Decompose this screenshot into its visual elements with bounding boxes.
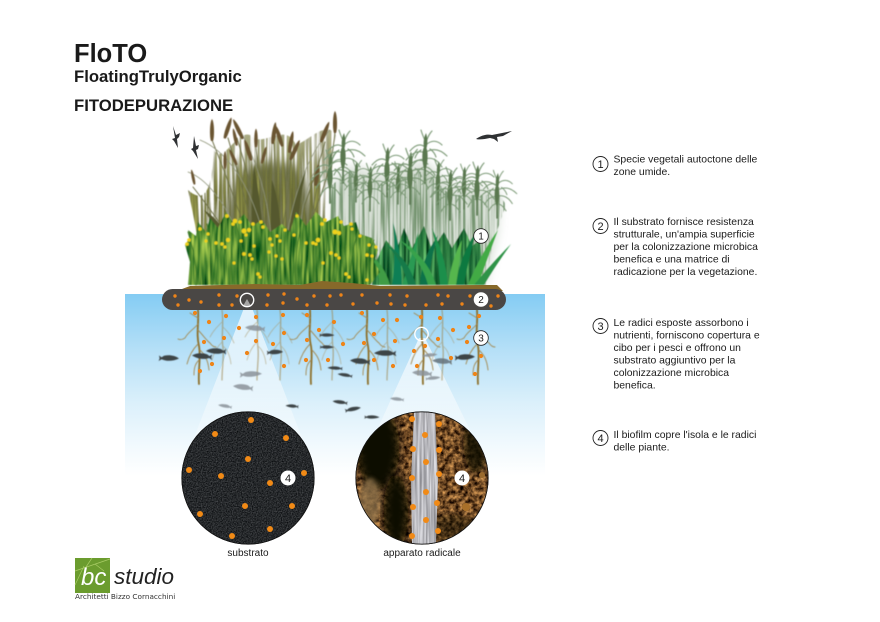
legend item 3: 3 xyxy=(597,321,604,333)
roots xyxy=(178,310,495,384)
legend item 3: nutrienti, forniscono copertura e xyxy=(614,330,760,342)
legend item 3: benefica. xyxy=(614,380,656,392)
icon: bird middle xyxy=(191,136,199,159)
soil layer xyxy=(182,281,503,291)
legend item 3 xyxy=(593,318,760,392)
magnifier ring: substrate xyxy=(240,293,254,307)
caption: apparato radicale: apparato radicale xyxy=(383,548,461,559)
subtitle: FloatingTrulyOrganic xyxy=(74,67,242,86)
yellow iris clump xyxy=(185,212,380,285)
legend item 4: Il biofilm copre l'isola e le radici xyxy=(614,430,756,441)
magnified circle: apparato radicale: 4 xyxy=(459,473,465,485)
legend item 4 xyxy=(593,430,756,454)
legend item 2 xyxy=(593,217,758,278)
green sedge clump xyxy=(362,222,511,285)
legend item 3: Le radici esposte assorbono i xyxy=(614,318,749,329)
legend item 3: substrato aggiuntivo per la xyxy=(614,356,736,366)
legend item 4: delle piante. xyxy=(614,442,670,454)
magnifier ring: root xyxy=(415,327,428,341)
caption: substrato: substrato xyxy=(227,548,269,559)
magnified circle: apparato radicale xyxy=(355,406,489,550)
legend item 2: 2 xyxy=(597,221,604,233)
title block xyxy=(74,40,242,115)
light beams from the magnified spots xyxy=(180,308,490,476)
logo bc: bc xyxy=(81,564,106,591)
legend item 1: 1 xyxy=(597,159,604,171)
legend item 2: benefica e una matrice di xyxy=(614,254,730,266)
legend item 1: Specie vegetali autoctone delle xyxy=(614,154,758,166)
legend item 2: strutturale, un'ampia superficie xyxy=(614,230,755,240)
root biofilm dots xyxy=(193,311,483,376)
legend item 2: Il substrato fornisce resistenza xyxy=(614,217,754,228)
substrate dots xyxy=(173,292,500,308)
icon: bird right xyxy=(476,131,512,142)
reeds: feathery grass with panicles xyxy=(311,130,517,285)
section heading: FITODEPURAZIONE xyxy=(74,96,233,115)
legend item 4: 4 xyxy=(597,433,604,445)
logo caption: Architetti Bizzo Cornacchini xyxy=(75,592,175,601)
birds xyxy=(172,126,512,159)
legend item 1 xyxy=(593,154,758,178)
logo studio: studio xyxy=(114,564,174,589)
reeds: cattail clump xyxy=(188,111,337,285)
callout markers on the diagram: 3 xyxy=(478,334,484,345)
logo: bc studio xyxy=(75,558,175,601)
water body xyxy=(125,294,545,476)
magnified circle: substrato: 4 xyxy=(285,473,291,485)
legend item 1: zone umide. xyxy=(614,167,670,178)
plants xyxy=(185,111,517,285)
floating island xyxy=(162,281,506,310)
legend item 2: per la colonizzazione microbica xyxy=(614,242,758,253)
fish school xyxy=(159,324,475,419)
icon: bird left xyxy=(172,126,180,148)
legend item 3: colonizzazione microbica xyxy=(614,368,729,379)
callout markers on the diagram: 1 xyxy=(478,232,484,243)
substrate mat xyxy=(162,289,506,310)
title: FloTO xyxy=(74,40,147,68)
legend item 3: cibo per i pesci e offrono un xyxy=(614,343,741,354)
legend item 2: radicazione per la vegetazione. xyxy=(614,267,757,278)
magnified circle: substrato xyxy=(181,411,315,545)
logo green leaf square xyxy=(75,558,110,593)
callout markers on the diagram: 2 xyxy=(478,295,484,306)
callout markers on the diagram xyxy=(474,229,488,345)
